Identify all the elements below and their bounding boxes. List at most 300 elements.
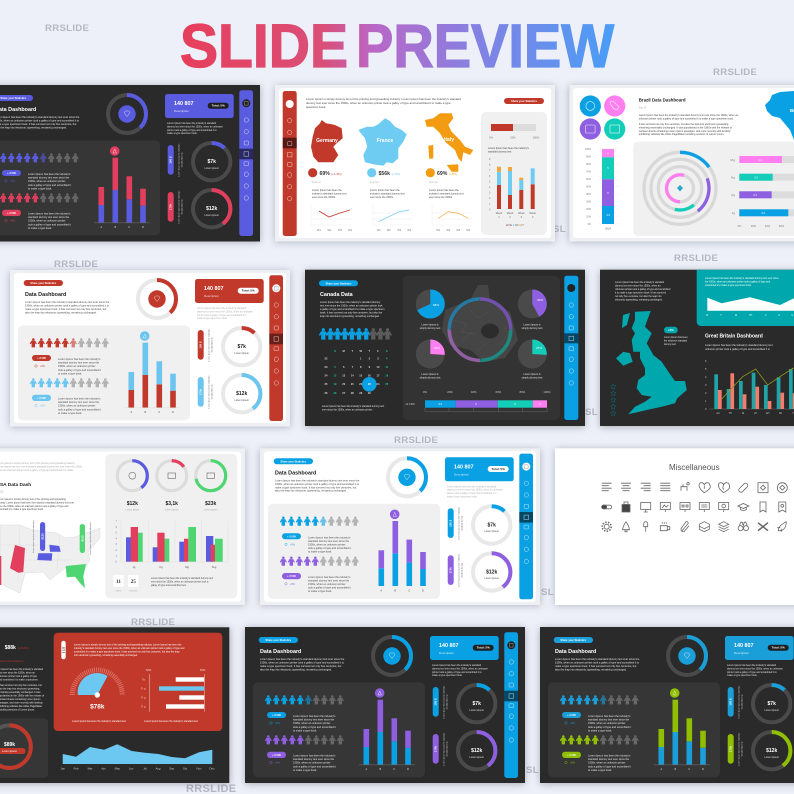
caption: Lorem Ipsum has been the industry's standard dummy text: [322, 405, 384, 408]
stacked bar chart: 5: [489, 180, 491, 183]
stat pill 1: +5%: [275, 722, 281, 725]
date: Sep 14: [639, 106, 647, 110]
card note: printer took a galley of type and scrambled it to: [727, 671, 777, 674]
card note: [727, 664, 783, 677]
left stat: [0, 645, 29, 663]
map: germany: Germany: [316, 138, 338, 144]
card note: printer took a galley of type and scrambled it to: [447, 492, 497, 495]
card note: dummy text ever since the 1500s, when an unknown: [167, 125, 223, 128]
calendar: 5: [334, 365, 336, 369]
combo chart: TH: [728, 412, 732, 415]
stat text 2: standard dummy text ever since the: [28, 215, 70, 219]
side stat 1: standard dummy: [741, 695, 744, 709]
card note: make a type specimen book.: [167, 132, 198, 135]
card: total: Description: [174, 109, 189, 113]
sidebar: [239, 90, 253, 236]
side stat 2: Lorem Ipsum has been the industry's: [208, 376, 211, 408]
side stat 2: standard dummy: [741, 742, 744, 756]
calendar: 4: [386, 356, 388, 360]
callout: +5%: [668, 328, 674, 332]
intro paragraph: Lorem Ipsum has been the industry's standard dummy text ever since the: [25, 300, 110, 304]
area chart: [60, 744, 215, 770]
intro text: electronic typesetting, remaining unchanged.: [615, 298, 663, 302]
paragraph: Letraset sheets containing Lorem Ipsum passages, and more recently with desktop: [639, 130, 731, 133]
side stat 2: Lorem Ipsum has been the industry's: [178, 191, 181, 223]
stat pill 1: [267, 712, 286, 725]
area chart: Dec: [210, 766, 215, 770]
ring 1: $7k: [473, 701, 481, 707]
pie 4: simply dummy text: [522, 376, 543, 380]
italy line chart: W2: [446, 228, 451, 232]
sidebar: [504, 632, 518, 778]
stat pill 1: + 2 000: [287, 534, 296, 538]
left ring panel: $89k: [4, 742, 15, 748]
italy stat: Lorem Ipsum has been the: [429, 189, 459, 192]
left stat: $88k: [5, 645, 16, 651]
combo chart: 6: [705, 359, 707, 363]
france stat: ever since the 1500s.: [370, 196, 394, 199]
card note: make a type specimen book.: [447, 495, 478, 498]
calendar: 28: [351, 391, 354, 395]
stacked bar: 2: [539, 402, 541, 406]
teal chart panel: T: [720, 314, 722, 317]
side stat 2: Lorem Ipsum has been the industry's: [443, 733, 446, 765]
slide: blue dark dashboard: [245, 627, 525, 784]
paragraph: [705, 343, 773, 351]
grouped bar chart: Jg: [133, 565, 136, 569]
stat text 1: to make a type book.: [28, 186, 52, 190]
horizontal bars: [141, 668, 206, 712]
heading: Canada Data: [320, 292, 354, 298]
calendar: 6: [343, 365, 345, 369]
intro text: dummy text ever since the 1500s, when an: [615, 284, 661, 288]
horizontal bars: J g: [732, 211, 736, 215]
side stat 2: [448, 554, 464, 587]
stat text 1: took a galley of type and scrambled it: [58, 368, 101, 372]
stat text 1: Lorem Ipsum has been the industry's: [293, 714, 336, 718]
people row 2: [265, 735, 344, 744]
stat text 2: Lorem Ipsum has been the industry's: [293, 754, 336, 758]
slide: red gauge dark: [0, 627, 230, 784]
side stat 1: 180 $: [729, 698, 733, 706]
card: total: [430, 636, 499, 660]
sidebar: [519, 454, 533, 599]
pill: share statistics: Share your Statistics: [0, 96, 27, 100]
france stat: [367, 168, 405, 199]
stacked bar: 12 15%: [405, 402, 415, 406]
italy stat: 69%: [437, 171, 448, 177]
stat pill 2: [32, 395, 51, 408]
calendar: 1: [360, 356, 362, 360]
progress bar: 0%: [489, 136, 494, 140]
sidebar: [564, 276, 578, 420]
side stat 2: [433, 733, 449, 765]
watermarks: SL: [541, 587, 554, 598]
intro text: specimen book.: [306, 105, 326, 109]
area chart: Jul: [143, 766, 147, 770]
card note: Lorem Ipsum has been the industry's standard: [167, 122, 217, 125]
intro paragraph: 1500s, when an unknown printer took a galley of type and scrambled it to: [275, 482, 359, 486]
title: slide preview: SLIDE: [180, 12, 348, 80]
stat pill 1: +5%: [570, 722, 576, 725]
stacked bar: 6: [475, 402, 477, 406]
side stat 2: [728, 733, 744, 765]
combo chart: [705, 359, 794, 415]
stat text 1: took a galley of type and scrambled it: [308, 546, 351, 550]
stat text 1: [293, 714, 336, 732]
area chart: Jan: [60, 766, 65, 770]
people row 1: [280, 516, 359, 526]
caption: ever since the 1500s, when an unknown printer.: [322, 408, 373, 412]
intro paragraph: Lorem Ipsum has been the industry's standard dummy text ever since the: [260, 657, 345, 661]
intro paragraph: also the leap into electronic typesetting, remaining unchanged.: [555, 667, 627, 671]
stat text 2: took a galley of type and scrambled it: [308, 586, 351, 590]
side stat 1: Lorem Ipsum has been the industry's: [738, 686, 741, 718]
ring 1: Lorem ipsum: [484, 530, 499, 533]
icon grid: [602, 482, 787, 532]
callout: dummy text: [664, 343, 676, 346]
card: total: Total: 5%: [212, 104, 225, 108]
ring 2: Lorem ipsum: [764, 756, 779, 759]
stat text 1: [588, 714, 631, 732]
stat pill 2: + 2 000: [37, 396, 46, 400]
stat text 1: standard dummy text ever since the: [58, 361, 100, 365]
stat text 1: [308, 535, 351, 554]
stat text 2: to make a type book.: [58, 411, 82, 415]
france line chart: W1: [377, 228, 381, 232]
calendar: 14: [351, 374, 354, 378]
caption: galley of type and scrambled text.: [151, 584, 187, 587]
pill: share statistics: Share your Statistics: [280, 459, 307, 463]
caption: Lorem Ipsum has been the industry's standard dummy text: [151, 577, 213, 580]
donut: [668, 637, 706, 675]
calendar: 23: [368, 382, 371, 386]
title: slide preview: [180, 12, 614, 80]
card note: [432, 664, 488, 677]
stacked bar: 5: [514, 402, 516, 406]
horizontal bars: 4.1: [758, 158, 762, 162]
panel: radial and bars: [633, 142, 794, 236]
horizontal bars: Ta: [142, 678, 145, 682]
stat text 1: 1500s, when an unknown printer: [308, 542, 346, 546]
people row 1: [560, 695, 639, 704]
stat text 2: to make a type book.: [293, 768, 317, 772]
card: total: [445, 457, 514, 481]
stacked column: 6: [607, 191, 609, 195]
map: canada: [442, 285, 518, 362]
pill: share statistics: Share your Statistics: [265, 638, 292, 642]
watermarks: RRSLIDE: [45, 23, 90, 34]
grouped bar chart: 0: [116, 561, 118, 564]
germany line chart: W1: [317, 228, 322, 232]
combo chart: LP: [754, 412, 757, 415]
stacked bar chart: 4: [532, 215, 534, 219]
teal chart panel: F: [765, 314, 767, 317]
stat text 1: standard dummy text ever since the: [28, 176, 70, 180]
card note: make a type specimen book.: [727, 674, 758, 677]
sidebar: [283, 91, 297, 236]
grouped bar chart: Kg: [159, 565, 163, 569]
teal chart panel: Lorem Ipsum has been the industry's standard dummy text ever since: [705, 277, 779, 280]
combo chart: 4: [705, 375, 707, 379]
stat pill 2: [562, 752, 581, 765]
ring 1: [117, 461, 147, 512]
card note: [447, 485, 503, 498]
calendar: 21: [351, 382, 354, 386]
stat text 2: [293, 754, 336, 772]
stat text 1: to make a type book.: [293, 728, 317, 732]
pill: share statistics: Share your Statistics: [30, 281, 57, 285]
germany line chart: W3: [338, 228, 343, 232]
calendar: 30: [368, 391, 371, 395]
france line chart: [373, 205, 413, 232]
donut: [373, 637, 411, 675]
calendar: M: [343, 349, 345, 353]
card note: printer took a galley of type and scrambled it to: [167, 129, 217, 132]
horizontal bars: 4.3: [761, 211, 765, 215]
stacked bar chart: 4: [489, 186, 491, 189]
germany stat: ever since the 1500s.: [312, 196, 336, 199]
stacked bar chart: Week: [529, 211, 537, 215]
paragraph: unknown printer took a galley of type and scrambled it to: [705, 347, 770, 351]
stat text 2: Lorem Ipsum has been the industry's: [308, 575, 351, 579]
area chart: Jun: [129, 766, 134, 770]
countdown boxes: 25: [131, 579, 136, 585]
grouped bar chart: 7: [116, 520, 118, 523]
side stat 1: 180 $: [434, 698, 438, 706]
ring 2: [223, 375, 260, 412]
progress bar: 100%: [533, 136, 540, 140]
panel: people and bars: [253, 682, 425, 777]
grouped bar chart: Mg: [185, 565, 189, 569]
stacked bar chart: 9: [489, 158, 491, 161]
intro paragraph: Lorem Ipsum has been the industry's standard dummy text ever since the: [275, 478, 360, 482]
stacked bar: 0%: [423, 390, 428, 394]
intro paragraph: make a type specimen book. It has survived not only five centuries, but: [275, 485, 357, 489]
pie 1: 68%: [433, 303, 439, 307]
pie 1: [416, 290, 445, 330]
area chart: Aug: [156, 766, 161, 770]
panel: usa stats: [105, 454, 237, 598]
stacked bar: 20%: [447, 390, 453, 394]
panel: map and pies: [403, 276, 560, 420]
combo chart: 0: [705, 407, 707, 411]
stat pill 2: [2, 210, 21, 223]
donut: [388, 458, 426, 496]
intro text: Lorem Ipsum has been the industry's standard: [615, 281, 665, 284]
ring 2: Lorem ipsum: [204, 214, 219, 217]
watermarks: SL: [585, 407, 598, 418]
people row 1: [30, 338, 109, 347]
horizontal bars: 3.3: [754, 176, 758, 180]
pill: share statistics: [24, 280, 63, 286]
teal chart panel: S: [778, 314, 780, 317]
stat text 2: 1500s, when an unknown printer: [293, 761, 331, 765]
stat text 2: took a galley of type and scrambled it: [58, 407, 101, 411]
vertical pills: $123: [80, 535, 84, 542]
ring 2: Lorem ipsum: [165, 508, 179, 512]
combo chart: SC: [779, 412, 782, 415]
card: total: Description: [204, 294, 219, 298]
paragraph: [320, 301, 385, 318]
red panel: [54, 633, 222, 731]
germany stat: [308, 168, 347, 199]
ring 1: Lorem ipsum: [234, 352, 249, 355]
teal chart panel: W: [735, 314, 738, 317]
france stat: (+5%): [392, 172, 400, 176]
combo chart: 3: [705, 383, 707, 387]
stacked bar chart: 8: [489, 164, 491, 167]
stat text 2: standard dummy text ever since the: [588, 757, 630, 761]
countdown boxes: 11: [116, 579, 121, 585]
slide: great britain: [600, 270, 794, 427]
caption: [322, 405, 384, 412]
stat text 2: took a galley of type and scrambled it: [28, 222, 71, 226]
stacked bar chart: B: [144, 411, 146, 414]
pie 1: Lorem Ipsum is: [421, 324, 439, 326]
stat text 1: Lorem Ipsum has been the industry's: [308, 535, 351, 539]
ring 2: [157, 461, 187, 512]
calendar: 13: [342, 374, 346, 378]
side stat 2: Lorem Ipsum has been the industry's: [458, 554, 461, 587]
paragraph: into electronic typesetting, remaining essentially unchanged.: [74, 654, 138, 657]
ring 2: [193, 190, 230, 227]
stacked bar chart: [489, 158, 537, 227]
stacked bar chart: C: [393, 768, 395, 771]
calendar: 23: [325, 365, 328, 369]
side stat 1: 180 $: [199, 341, 203, 348]
intro text: Lorem Ipsum is simply dummy text of the printing and typesetting industry. Lorem Ipsum has been the industry's standard: [306, 97, 461, 101]
ring 2: Lorem ipsum: [484, 577, 499, 580]
calendar: 12: [334, 374, 337, 378]
stacked bar: 40%: [471, 390, 477, 394]
side stat 2: 170k: [199, 388, 203, 395]
germany stat: 69%: [320, 171, 330, 177]
calendar: 26: [325, 391, 328, 395]
stacked bar: [405, 390, 551, 412]
slide: brazil: [569, 85, 794, 242]
card note: make a type specimen book.: [432, 674, 463, 677]
side stat 1: 180 $: [449, 519, 453, 527]
pill: Share your Statistics: [326, 281, 352, 285]
stacked column: 30%: [586, 200, 592, 204]
combo chart: 1: [705, 399, 707, 403]
ring 2: [458, 732, 495, 769]
stacked bar chart: B: [114, 226, 116, 229]
stacked bar chart: A: [100, 226, 102, 229]
map: france: [358, 118, 407, 166]
stat pill 1: [2, 170, 21, 183]
ring 2: $12k: [486, 569, 497, 575]
stat text 2: took a galley of type and scrambled it: [588, 764, 631, 768]
calendar: 25: [325, 382, 328, 386]
stat text 1: [58, 357, 101, 375]
heading: Data Dashboard: [260, 649, 301, 655]
italy stat: industry's standard dummy text: [429, 192, 464, 196]
stacked bar chart: ■ DE ■ FR ■ IT: [506, 223, 524, 227]
stacked bar chart: 3: [521, 215, 523, 219]
horizontal bars: 50%: [146, 668, 152, 672]
intro paragraph: [0, 115, 80, 129]
pill: [319, 280, 358, 286]
calendar: F: [377, 349, 379, 353]
horizontal bars: M g: [731, 158, 736, 162]
card note: Lorem Ipsum has been the industry's standard: [197, 307, 247, 310]
slide: canada: [305, 270, 585, 427]
ring 1: [223, 328, 260, 365]
paragraph: Lorem Ipsum has been the Industry's standard dummy text: [705, 343, 773, 347]
left ring panel: [0, 718, 48, 778]
vertical pills: $123: [40, 533, 44, 540]
calendar: S: [386, 349, 388, 353]
stacked bar chart: 6: [489, 175, 491, 178]
stacked column: 2024: [605, 226, 611, 230]
intro paragraph: also the leap into electronic typesetting, remaining unchanged.: [275, 489, 347, 493]
area chart: Nov: [197, 766, 202, 770]
map: usa: [0, 525, 100, 593]
stat text 2: Lorem Ipsum has been the industry's: [588, 754, 631, 758]
italy stat: ever since the 1500s.: [429, 196, 453, 199]
germany stat: industry's standard dummy text: [312, 192, 347, 196]
side stat 1: 180 $: [169, 156, 173, 164]
ring: [449, 299, 511, 360]
stacked bar chart: 2: [509, 215, 511, 219]
stacked bar chart: 0: [489, 208, 491, 211]
paragraph: leap into electronic typesetting, remaining unchanged.: [320, 315, 380, 318]
italy line chart: W1: [436, 228, 441, 232]
stat pill 2: +5%: [570, 762, 576, 765]
stacked bar chart: B: [394, 589, 396, 592]
side stat 1: standard dummy: [461, 516, 464, 531]
stacked bar chart: [359, 688, 415, 771]
calendar: T: [369, 349, 371, 353]
paragraph: remaining essentially unchanged. It was popularised in the 1960s with the release of: [639, 126, 732, 129]
stat pill 2: +5%: [10, 220, 16, 223]
watermarks: RRSLIDE: [54, 259, 99, 270]
pill: share statistics: [0, 95, 33, 101]
stat text 2: 1500s, when an unknown printer: [308, 582, 346, 586]
stacked bar chart: [654, 688, 710, 771]
slide: red light dashboard: [10, 270, 290, 427]
side stat 1: standard dummy: [446, 695, 449, 709]
stat pill 2: + 2 000: [7, 211, 16, 215]
teal chart panel: S: [791, 314, 793, 317]
stat pill 2: [282, 573, 301, 586]
ring 1: [753, 685, 790, 722]
paragraph: industry's standard dummy text ever since the 1500s, when an unknown printer took a galley of type and: [74, 647, 185, 650]
calendar: 19: [334, 382, 337, 386]
stacked bar chart: Week: [496, 211, 503, 215]
left stat: (+5.2%): [18, 646, 29, 650]
card note: make a type specimen book.: [197, 317, 228, 320]
area chart: Mar: [88, 766, 92, 770]
stacked bar chart: A: [380, 589, 382, 592]
card note: Lorem Ipsum has been the industry's standard: [727, 664, 777, 667]
card: total: Total: 5%: [477, 646, 490, 650]
side stat 1: Lorem Ipsum has been the industry's: [178, 144, 181, 176]
slide: purple red dark dashboard: [0, 85, 260, 242]
teal chart panel: M: [706, 314, 708, 317]
intro text: unknown printer took a galley of type and scrambled: [615, 288, 671, 291]
germany stat: Europe: [312, 180, 321, 184]
stacked bar chart: D: [702, 768, 704, 771]
teal chart panel: TH: [749, 314, 753, 317]
horizontal bars: Tr g: [141, 686, 146, 690]
card note: dummy text ever since the 1500s, when an unknown: [197, 310, 253, 313]
stacked bar chart: [94, 146, 150, 229]
people row 1: [0, 153, 79, 162]
intro text: [306, 97, 461, 109]
